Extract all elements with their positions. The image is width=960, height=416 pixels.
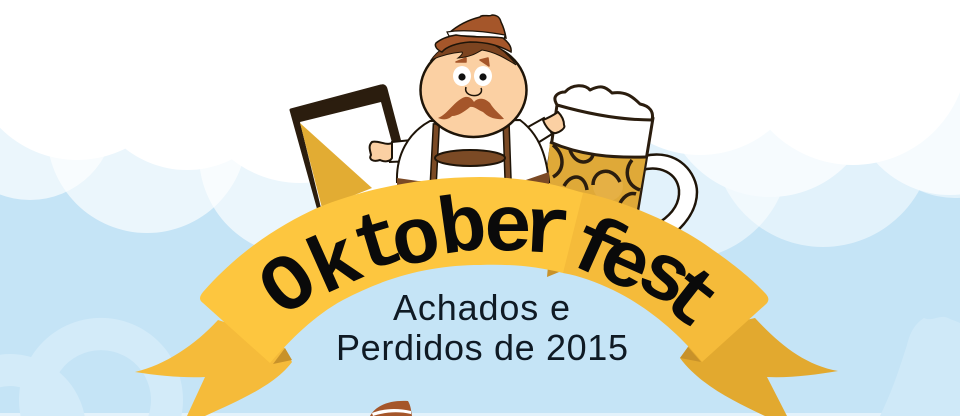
character: bavarian man (370, 15, 564, 186)
title: Oktoberfest: Oktober (244, 182, 573, 338)
mug handle (642, 155, 697, 232)
icon: small hat at page edge (370, 401, 412, 416)
hat (435, 15, 511, 52)
ribbon folds (273, 266, 701, 364)
head (420, 43, 526, 137)
icon: tablet (291, 86, 402, 214)
ribbon right tail (680, 318, 838, 416)
decorative pretzel silhouette (0, 318, 183, 416)
ribbon left tail (135, 320, 292, 416)
eyes (453, 66, 492, 86)
belt (435, 150, 505, 166)
moustache (438, 97, 504, 119)
subtitle: Perdidos de 2015 (336, 327, 628, 368)
body (397, 120, 549, 182)
ribbon left segment (200, 177, 583, 363)
suspenders (430, 124, 511, 184)
subtitle (336, 287, 628, 368)
eyebrows (456, 58, 489, 66)
nose (466, 87, 482, 96)
beer foam (555, 86, 652, 120)
hair (431, 39, 516, 65)
title: Oktoberfest: fest (555, 202, 736, 351)
right arm (528, 112, 564, 144)
icon: beer mug (540, 86, 697, 232)
decorative beer mug silhouette (880, 317, 960, 416)
subtitle: Achados e (393, 287, 570, 328)
left arm (370, 140, 412, 162)
mug glass (545, 105, 653, 215)
beer fill with bubbles (548, 142, 646, 210)
ribbon right segment (563, 190, 768, 362)
ribbon banner (135, 177, 838, 416)
